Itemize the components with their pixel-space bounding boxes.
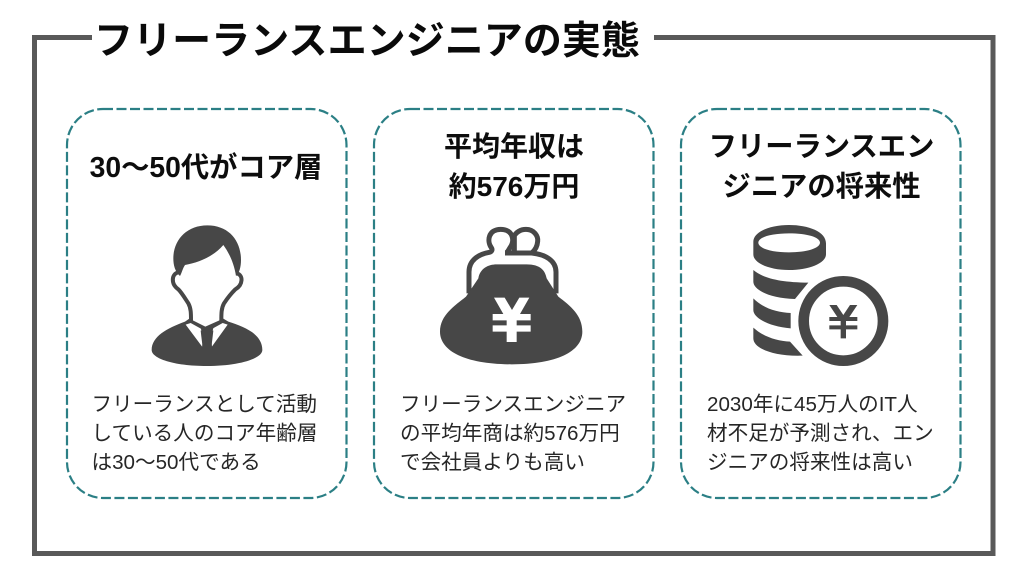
- panel: average income: 約576万円: [449, 171, 579, 202]
- panel: core age group: している人のコア年齢層: [92, 422, 317, 445]
- title: フリーランスエンジニアの実態: [94, 20, 640, 63]
- panel: average income: の平均年商は約576万円: [400, 422, 620, 445]
- icon: businessman: [152, 225, 262, 366]
- body text: future outlook: 2030年に45万人のIT人: [707, 393, 918, 416]
- heading: core age: 30〜50代がコア層: [90, 151, 322, 183]
- panel: average income: で会社員よりも高い: [400, 451, 585, 474]
- panel: future outlook: ジニアの将来性は高い: [707, 451, 913, 474]
- icon: coin stack: [753, 225, 883, 361]
- icon: coin purse: [440, 229, 582, 364]
- heading: future outlook: フリーランスエン: [709, 130, 934, 162]
- panel: future outlook: 材不足が予測され、エン: [707, 422, 934, 445]
- body text: core age: フリーランスとして活動: [92, 393, 317, 416]
- card border: [681, 109, 960, 498]
- panel: future outlook: ジニアの将来性: [722, 170, 921, 202]
- card border: [374, 109, 654, 498]
- panel: core age group: は30〜50代である: [92, 451, 261, 474]
- panel: average income: [374, 109, 654, 498]
- panel: core age group: [67, 109, 346, 498]
- card border: [67, 109, 346, 498]
- panel: future outlook: [681, 109, 960, 498]
- body text: average income: フリーランスエンジニア: [400, 393, 626, 416]
- heading: average income: 平均年収は: [444, 131, 584, 162]
